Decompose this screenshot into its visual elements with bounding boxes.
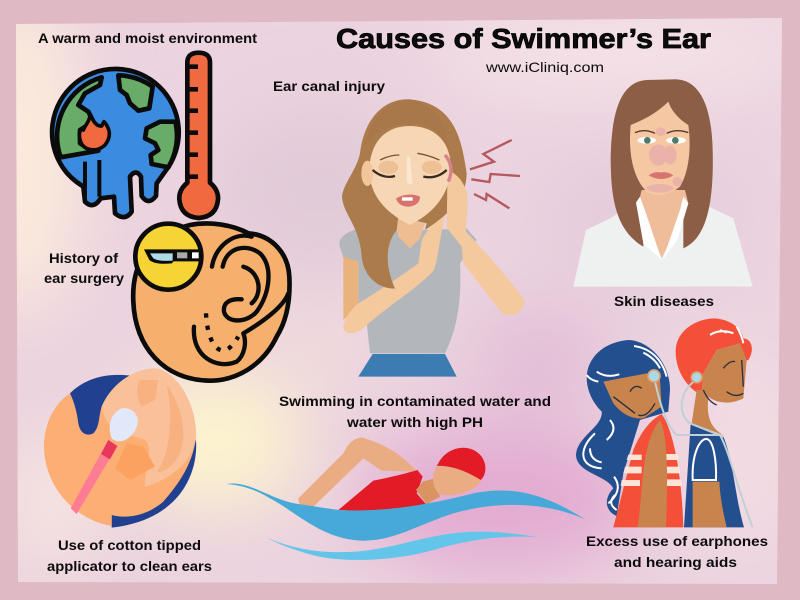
skin rash: [647, 127, 682, 193]
red swimsuit: [338, 470, 427, 511]
face: [630, 102, 690, 195]
eyes and brows: [378, 161, 398, 174]
pain bolts: [470, 140, 520, 208]
label: earphones and hearing aids: Excess use of earphones: [586, 533, 768, 549]
neck: [416, 478, 440, 504]
dress stripes: [621, 454, 681, 486]
label: earphones and hearing aids: [586, 533, 768, 570]
scalpel: [144, 249, 201, 264]
face lines: [613, 360, 743, 416]
red dress: [613, 414, 683, 527]
ear canal: [115, 443, 155, 480]
left forearm and hand: [343, 215, 445, 333]
icon: globe: [52, 69, 179, 217]
label: cotton tipped applicator: Use of cotton tipped: [58, 537, 201, 553]
eyes and brows: [635, 131, 688, 144]
illustration: cotton swab in ear: [44, 368, 196, 528]
arm: [298, 437, 417, 509]
jeans: [358, 354, 457, 377]
arm line: [693, 439, 716, 480]
head: [433, 466, 482, 495]
hair: [342, 99, 467, 288]
neck and chest: [395, 217, 425, 248]
ear circle: [133, 223, 290, 381]
large wave: [226, 483, 585, 541]
forehead hair: [364, 100, 450, 153]
label: history of ear surgery: History of: [49, 250, 118, 266]
blue hair: [70, 375, 196, 528]
label: swimming: Swimming in contaminated water and: [279, 393, 551, 409]
upper left arm: [343, 257, 358, 320]
outer ear: [102, 368, 196, 487]
label: history of ear surgery: ear surgery: [44, 270, 124, 286]
label: swimming: [279, 393, 551, 430]
illustration: woman with skin disease: [573, 79, 753, 287]
incision dots: [206, 313, 238, 351]
icon: thermometer: [179, 53, 218, 218]
cotton swab stick: [71, 440, 117, 514]
lips: [649, 172, 673, 179]
icon: melting globe and thermometer: [52, 53, 218, 218]
hair highlights: [583, 327, 743, 510]
label: cotton tipped applicator: [47, 537, 212, 574]
skin: [44, 368, 196, 526]
label: skin diseases: Skin diseases: [614, 293, 714, 309]
blouse: [573, 197, 753, 287]
icon: ear surgery: [133, 223, 290, 381]
inner ear folds: [137, 380, 183, 472]
cotton head: [110, 408, 138, 441]
left woman's arm: [637, 420, 667, 527]
hair: [611, 79, 713, 248]
label: ear canal injury: Ear canal injury: [273, 78, 385, 94]
label: warm and moist environment: A warm and moist environment: [38, 30, 257, 46]
label: earphones and hearing aids: and hearing aids: [614, 554, 737, 570]
collar: [636, 197, 688, 260]
earphone cables: [655, 380, 753, 527]
blue hair: [576, 340, 670, 516]
right person's neck and face: [692, 343, 747, 435]
small wave: [267, 532, 538, 560]
scalpel lens: [135, 224, 201, 290]
label: cotton tipped applicator: applicator to clean ears: [47, 558, 212, 574]
website: www.iCliniq.com: [485, 59, 604, 75]
illustration: woman with ear pain: [339, 99, 524, 377]
illustration: people with earphones: [576, 318, 753, 527]
neck: [638, 190, 688, 258]
left woman's face: [603, 373, 662, 418]
blue top: [684, 423, 744, 527]
label: swimming: water with high PH: [346, 414, 483, 430]
earphones: [648, 370, 702, 383]
ear soreness: [445, 155, 451, 182]
right person's arm: [693, 482, 727, 527]
label: history of ear surgery: [44, 250, 124, 286]
title: Causes of Swimmer’s Ear: [336, 23, 711, 54]
shirt: [339, 228, 477, 353]
ear lines: [194, 236, 288, 364]
face: [369, 126, 451, 225]
mouth: [396, 195, 420, 207]
swim cap: [437, 448, 485, 480]
right arm and hand: [447, 170, 524, 315]
red cap: [676, 318, 752, 395]
illustration: swimmer: [226, 437, 585, 560]
